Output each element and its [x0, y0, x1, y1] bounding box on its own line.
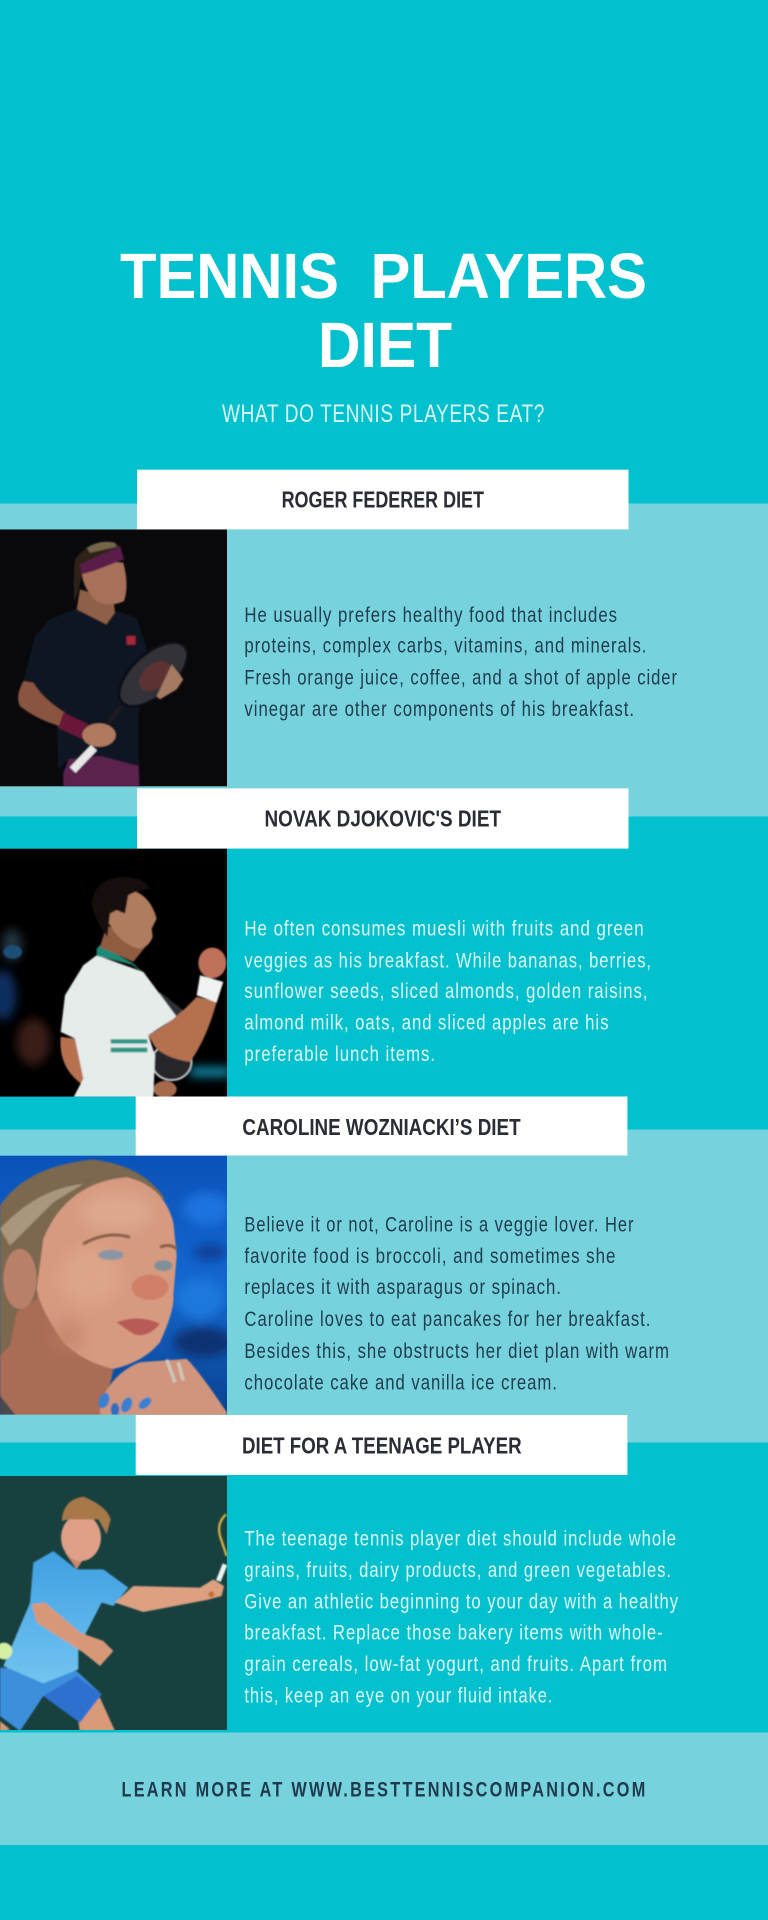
text: Djokovic diet: He often consumes muesli with fruits and green	[244, 918, 645, 941]
photo: Caroline Wozniacki	[0, 1156, 233, 1417]
text: teenage diet: this, keep an eye on your fluid intake.	[244, 1684, 553, 1707]
heading: Caroline Wozniacki: CAROLINE WOZNIACKI’S DIET	[242, 1114, 521, 1140]
panel: Roger Federer	[0, 470, 678, 786]
photo: teenage player	[0, 1476, 227, 1733]
text: teenage diet: breakfast. Replace those bakery items with whole-	[244, 1621, 664, 1644]
text: Wozniacki diet	[244, 1214, 670, 1394]
text: Wozniacki diet: chocolate cake and vanilla ice cream.	[244, 1371, 558, 1394]
title: TENNIS PLAYERS	[120, 240, 647, 312]
heading: Novak Djokovic: NOVAK DJOKOVIC'S DIET	[264, 806, 501, 832]
text: teenage diet	[244, 1528, 679, 1707]
band: Federer section	[0, 504, 768, 816]
text: Wozniacki diet: Caroline loves to eat pancakes for her breakfast.	[244, 1308, 651, 1331]
panel: Novak Djokovic	[0, 788, 652, 1098]
band: Wozniacki section	[0, 1130, 768, 1442]
photo: Roger Federer	[0, 529, 227, 786]
heading: teenage player	[136, 1415, 627, 1475]
text: Wozniacki diet: favorite food is broccoli, and sometimes she	[244, 1245, 616, 1268]
title: DIET	[318, 309, 452, 381]
text: Djokovic diet: preferable lunch items.	[244, 1043, 436, 1066]
text: Djokovic diet: veggies as his breakfast. While bananas, berries,	[244, 949, 652, 972]
text: Wozniacki diet: replaces it with asparagus or spinach.	[244, 1276, 562, 1299]
text: Wozniacki diet: Besides this, she obstructs her diet plan with warm	[244, 1340, 670, 1363]
text: Djokovic diet: sunflower seeds, sliced almonds, golden raisins,	[244, 980, 648, 1003]
title	[120, 240, 647, 381]
heading: Roger Federer: ROGER FEDERER DIET	[282, 487, 484, 513]
photo: Novak Djokovic	[0, 849, 230, 1098]
text: Federer diet	[244, 604, 678, 721]
heading: Novak Djokovic	[137, 788, 628, 849]
panel: Caroline Wozniacki	[0, 1096, 670, 1417]
text: Federer diet: proteins, complex carbs, vitamins, and minerals.	[244, 635, 647, 658]
band: footer	[0, 1732, 768, 1845]
text: Djokovic diet	[244, 918, 652, 1066]
subtitle: WHAT DO TENNIS PLAYERS EAT?	[222, 400, 545, 428]
text: Federer diet: He usually prefers healthy food that includes	[244, 604, 618, 627]
text: Wozniacki diet: Believe it or not, Caroline is a veggie lover. Her	[244, 1214, 634, 1237]
heading: Caroline Wozniacki	[136, 1096, 627, 1156]
heading: teenage player: DIET FOR A TEENAGE PLAYER	[242, 1432, 522, 1458]
text: Federer diet: vinegar are other components of his breakfast.	[244, 698, 635, 721]
text: Djokovic diet: almond milk, oats, and sliced apples are his	[244, 1012, 609, 1035]
heading: Roger Federer	[137, 470, 628, 529]
text: teenage diet: grain cereals, low-fat yogurt, and fruits. Apart from	[244, 1653, 668, 1676]
panel: teenage player	[0, 1415, 679, 1733]
